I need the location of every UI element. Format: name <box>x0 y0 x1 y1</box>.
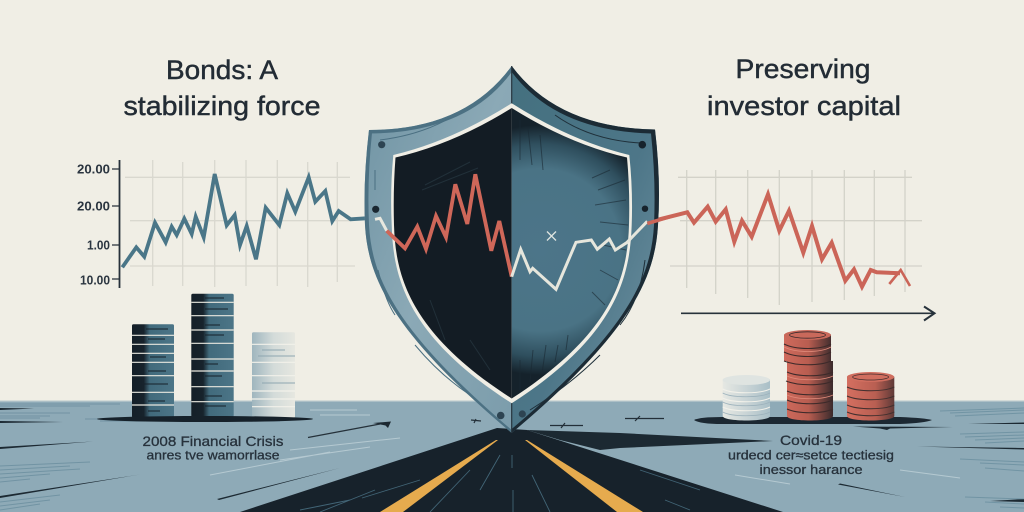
shield rivets <box>372 141 648 419</box>
shield inner white border <box>391 103 632 403</box>
shield chart: white recovery line <box>512 221 647 289</box>
shield chart: red exit segment <box>647 217 670 224</box>
shield frame: left half <box>364 66 512 433</box>
coin shadow: left <box>97 416 313 422</box>
line chart: right capital <box>650 170 922 305</box>
coin stack: 2008 centre tall <box>191 294 234 417</box>
shield chart: connector from left <box>375 218 387 231</box>
title: right heading second line: investor capital <box>707 91 901 121</box>
road lane markings <box>380 440 498 512</box>
title: left heading: Bonds: A <box>166 55 278 85</box>
ground streaks: light <box>210 410 960 484</box>
shield panel: left dark <box>394 108 512 398</box>
ground streaks: texture <box>0 404 1024 510</box>
shield panel: right teal <box>512 108 629 398</box>
arrow: ground left <box>308 422 391 438</box>
ground plane <box>0 400 1024 512</box>
shield <box>364 66 670 433</box>
icon: small cross <box>547 232 556 240</box>
shield dark outer edge <box>512 66 659 433</box>
caption: 2008 financial crisis: 2008 Financial Crisis <box>142 433 284 449</box>
shield frame detail strokes <box>375 118 470 395</box>
line chart: left bonds: 1.00 <box>87 238 110 252</box>
line chart: left bonds: 20.00 <box>77 162 110 176</box>
caption: 2008 financial crisis <box>142 433 284 462</box>
line chart: left bonds: 20.00 <box>77 200 110 214</box>
arrow: right chart timeline <box>681 306 934 320</box>
ground streaks: dark <box>0 408 1024 502</box>
shield panel texture <box>520 120 628 390</box>
coin stack: covid short red <box>847 372 894 420</box>
line chart: left bonds <box>77 160 366 288</box>
road <box>240 428 783 512</box>
coin stack: covid tall red <box>784 330 833 420</box>
coin stack: covid white <box>723 375 770 420</box>
road centre streaks <box>300 455 700 512</box>
shield chart: red falling line <box>387 174 512 277</box>
icon: ground cross marks <box>471 416 664 428</box>
caption: 2008 financial crisis: anres tve wamorrlase <box>146 448 280 462</box>
title: right heading: Preserving <box>736 54 870 84</box>
caption: covid-19 <box>728 432 894 477</box>
caption: covid-19: urdecd cer≈setce tectiesig <box>728 448 894 462</box>
caption: covid-19: inessor harance <box>760 462 862 477</box>
coin shadow: right <box>694 417 932 424</box>
shield frame: right half <box>512 66 659 433</box>
coin stack: 2008 left dark <box>132 324 174 418</box>
title: left heading second line: stabilizing force <box>124 91 320 121</box>
coin stack: 2008 right pale <box>252 332 295 418</box>
caption: covid-19: Covid-19 <box>780 432 842 448</box>
line chart: left bonds: 10.00 <box>80 274 110 288</box>
